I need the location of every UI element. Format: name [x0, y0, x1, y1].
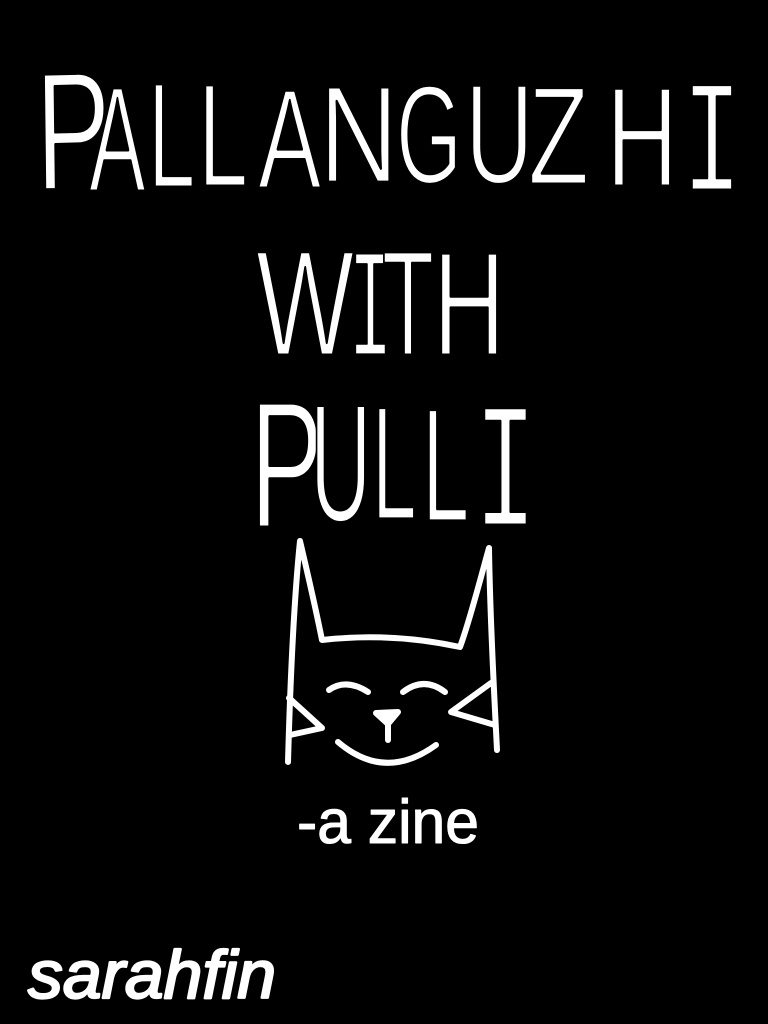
title: Pulli: L [372, 373, 416, 555]
title: Pulli: L [422, 376, 469, 556]
title: with: I [348, 226, 393, 402]
title: Pallanguzhi: H [606, 59, 678, 217]
title: Pallanguzhi [34, 37, 742, 239]
title: Pallanguzhi: G [396, 56, 462, 213]
title: Pallanguzhi: P [34, 37, 112, 226]
title: Pallanguzhi: U [465, 55, 534, 214]
icon: smiling cat [288, 541, 497, 763]
subtitle: a zine: -a zine [297, 787, 479, 856]
title: with: W [256, 220, 354, 388]
title: Pallanguzhi: L [198, 53, 248, 217]
title: Pallanguzhi: I [682, 58, 742, 239]
title: Pallanguzhi: A [89, 56, 146, 223]
signature: sarahfin: sarahfin [28, 936, 276, 1013]
title: Pallanguzhi: Z [528, 57, 589, 214]
title: Pulli [250, 364, 537, 579]
title: Pallanguzhi: A [258, 60, 322, 219]
title: Pallanguzhi: L [148, 52, 195, 219]
title: with [256, 220, 505, 402]
title: with: H [433, 221, 505, 387]
title: Pulli: U [310, 370, 371, 558]
title: Pallanguzhi: N [319, 58, 398, 212]
title: with: T [382, 220, 434, 387]
title: Pulli: P [250, 364, 323, 566]
title: Pulli: I [474, 376, 537, 579]
